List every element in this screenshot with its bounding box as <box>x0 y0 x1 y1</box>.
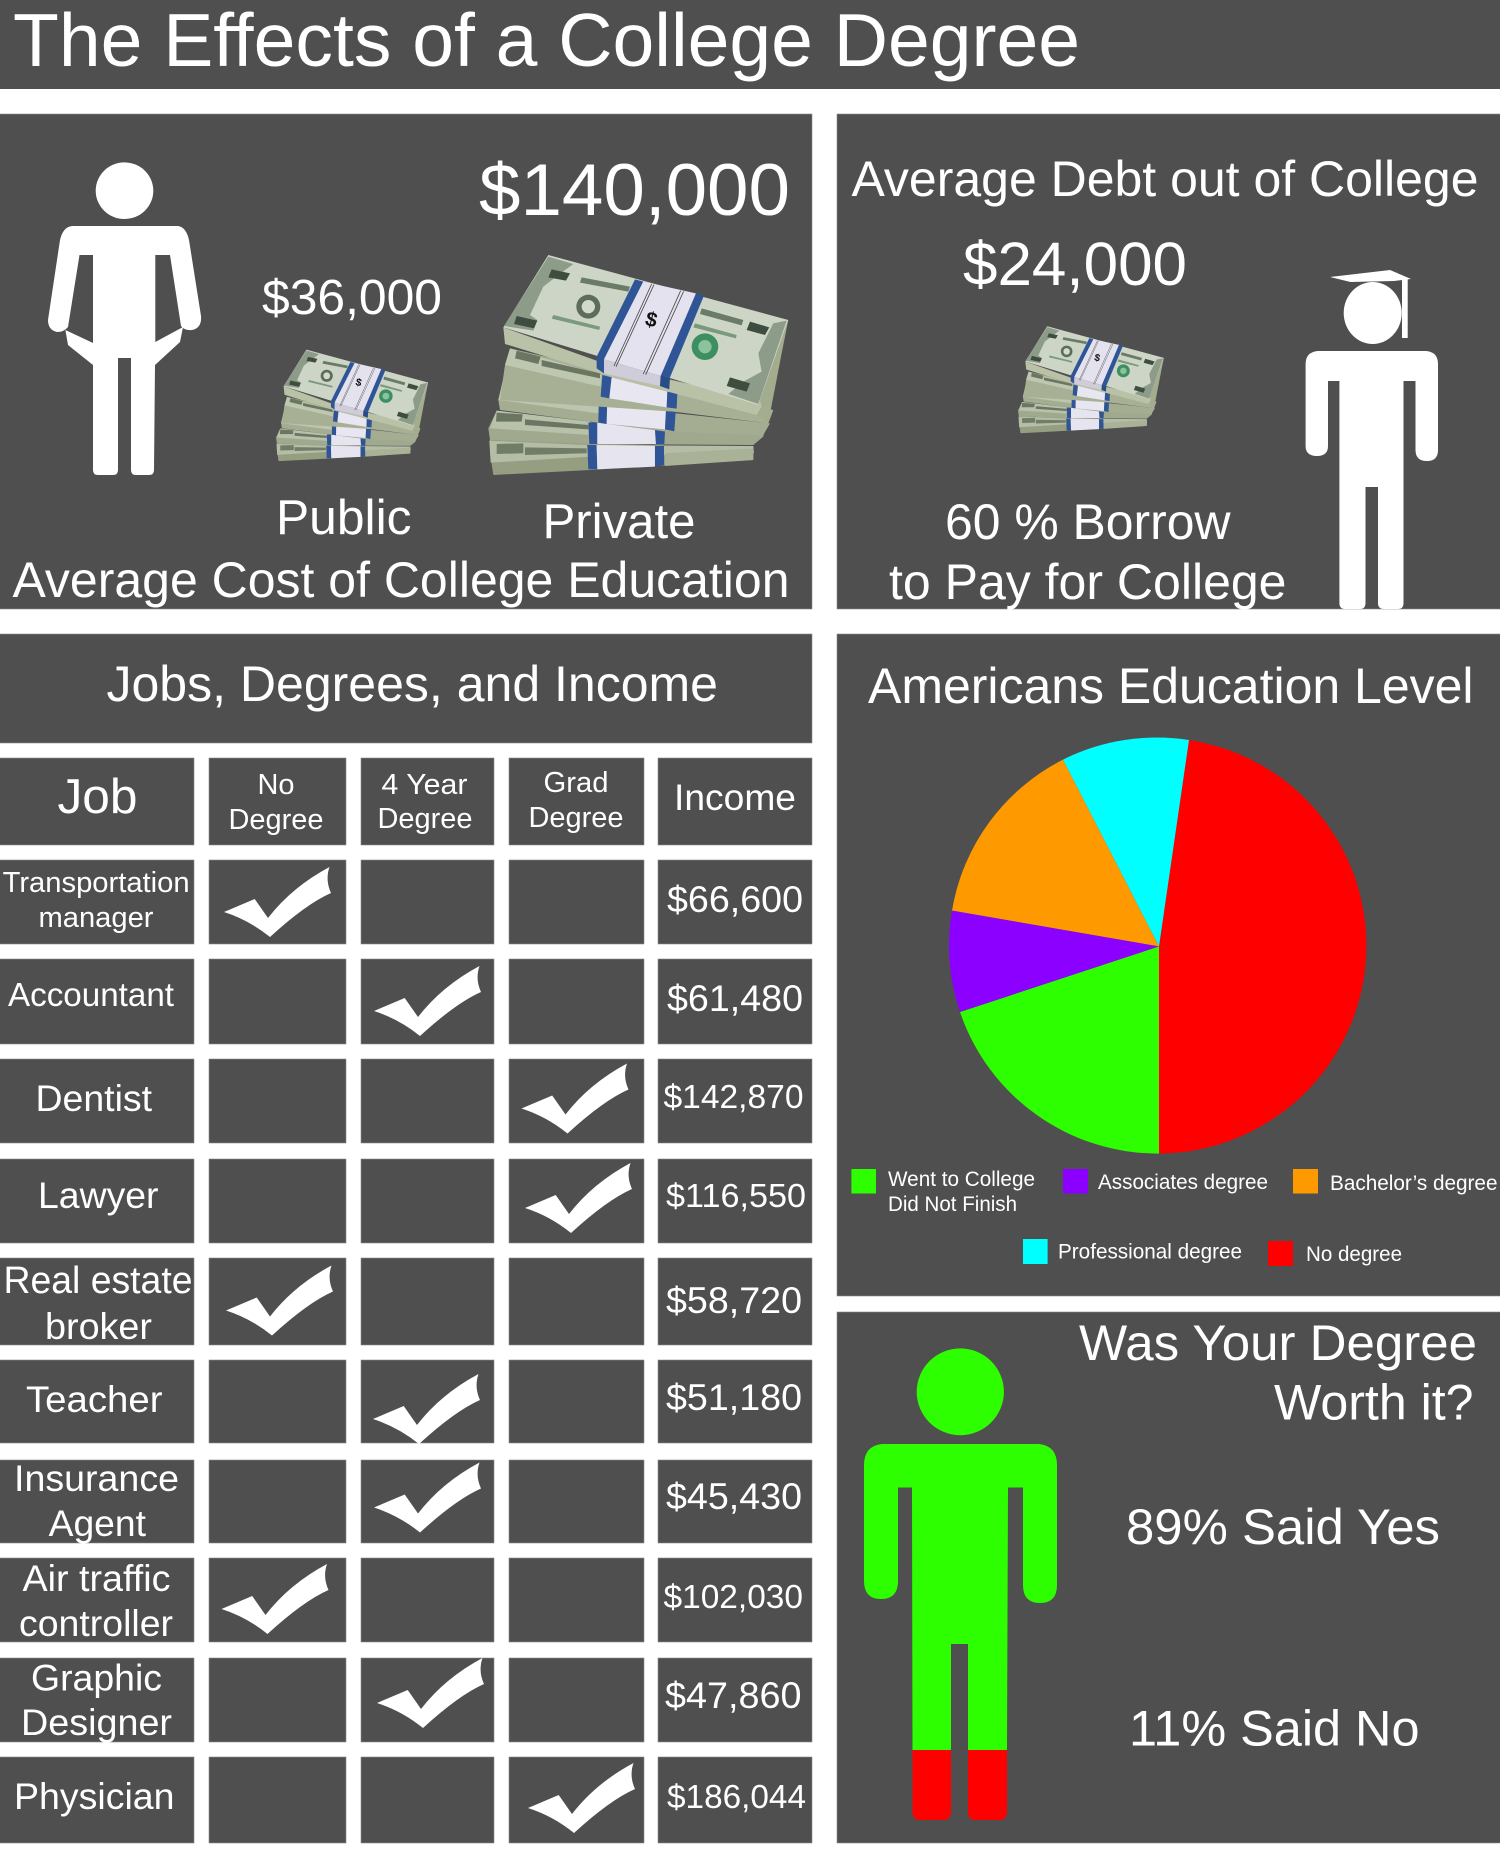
row: physician <box>0 1757 812 1843</box>
icon: person filled green and red <box>864 1348 1057 1820</box>
borrowing statistic: to Pay for College <box>889 554 1286 610</box>
row: lawyer <box>0 1159 812 1243</box>
row: lawyer: Lawyer <box>38 1175 158 1216</box>
panel: was your degree worth it <box>837 1312 1500 1843</box>
borrowing statistic <box>889 494 1286 610</box>
legend <box>851 1167 1498 1266</box>
row: accountant <box>0 959 812 1044</box>
row: graphic designer <box>0 1656 812 1743</box>
panel: average cost of college education <box>0 114 812 609</box>
heading: Average Debt out of College <box>852 151 1478 207</box>
row: air traffic controller <box>0 1557 812 1644</box>
row: air traffic controller: $102,030 <box>664 1579 803 1616</box>
table header row: Grad <box>544 767 608 799</box>
legend: Professional degree <box>1058 1240 1242 1264</box>
table header row: 4 Year <box>382 769 468 801</box>
table header row <box>0 758 812 845</box>
icon: money stack <box>1018 326 1164 433</box>
row: insurance agent: $45,430 <box>666 1476 802 1517</box>
row: lawyer: $116,550 <box>666 1178 806 1215</box>
title: The Effects of a College Degree <box>13 0 1080 82</box>
debt figure: $24,000 <box>963 230 1187 298</box>
legend: No degree <box>1306 1242 1402 1266</box>
table: jobs, degrees and income <box>0 758 812 1843</box>
private cost figure: $140,000 <box>479 150 790 231</box>
row: air traffic controller: controller <box>19 1602 173 1644</box>
row: real estate broker: broker <box>45 1305 152 1347</box>
row: transportation manager: $66,600 <box>667 879 803 920</box>
heading: Jobs, Degrees, and Income <box>106 656 718 712</box>
heading: Worth it? <box>1274 1375 1474 1431</box>
row: teacher <box>0 1360 812 1444</box>
statistic: no: 11% Said No <box>1129 1701 1420 1757</box>
heading: Was Your Degree <box>1079 1315 1477 1371</box>
icon: large money stack: $ <box>643 307 660 333</box>
row: teacher: $51,180 <box>666 1377 802 1418</box>
icon: large money stack <box>488 255 788 475</box>
row: real estate broker: $58,720 <box>666 1280 802 1321</box>
table header row: No <box>258 769 294 801</box>
row: real estate broker: Real estate <box>4 1260 192 1302</box>
legend: Bachelor’s degree <box>1330 1171 1498 1195</box>
row: teacher: Teacher <box>26 1379 162 1420</box>
row: insurance agent <box>0 1457 812 1544</box>
panel: jobs heading <box>0 634 812 743</box>
row: air traffic controller: Air traffic <box>22 1557 170 1599</box>
public cost figure: $36,000 <box>262 271 442 325</box>
row: graphic designer: Designer <box>21 1701 172 1743</box>
panel caption: Average Cost of College Education <box>12 552 790 608</box>
row: dentist <box>0 1059 812 1143</box>
legend: Did Not Finish <box>888 1192 1017 1216</box>
table header row: Job <box>58 770 138 824</box>
table header row: Income <box>674 777 796 818</box>
row: dentist: Dentist <box>36 1078 153 1119</box>
icon: small money stack: $ <box>354 377 363 389</box>
panel: average debt <box>837 114 1500 610</box>
table header row: Degree <box>528 802 624 834</box>
row: dentist: $142,870 <box>664 1079 804 1116</box>
row: graphic designer: Graphic <box>31 1656 162 1698</box>
table header row: Degree <box>228 804 324 836</box>
row: graphic designer: $47,860 <box>665 1675 802 1716</box>
row: insurance agent: Agent <box>49 1502 147 1544</box>
label: private: Private <box>542 495 696 549</box>
legend: Associates degree <box>1098 1170 1268 1194</box>
legend: Went to College <box>888 1167 1035 1191</box>
table header row: Degree <box>378 803 472 835</box>
icon: small money stack <box>276 350 428 461</box>
panel: americans education level <box>837 634 1500 1296</box>
row: physician: Physician <box>14 1775 174 1817</box>
icon: person with empty pockets <box>48 162 201 475</box>
label: public: Public <box>276 491 412 545</box>
title bar <box>0 0 1500 89</box>
heading: Americans Education Level <box>868 658 1474 714</box>
pie chart <box>949 738 1366 1154</box>
row: accountant: $61,480 <box>667 978 803 1019</box>
row: physician: $186,044 <box>667 1779 806 1816</box>
row: insurance agent: Insurance <box>14 1457 179 1499</box>
row: real estate broker <box>0 1258 812 1347</box>
borrowing statistic: 60 % Borrow <box>945 494 1231 550</box>
heading <box>1079 1315 1477 1431</box>
icon: graduate figure <box>1306 270 1438 609</box>
row: transportation manager: Transportation <box>3 867 190 899</box>
row: transportation manager: manager <box>38 902 154 934</box>
icon: money stack: $ <box>1093 353 1102 365</box>
statistic: yes: 89% Said Yes <box>1126 1499 1440 1555</box>
row: transportation manager <box>0 860 812 944</box>
row: accountant: Accountant <box>8 976 174 1013</box>
